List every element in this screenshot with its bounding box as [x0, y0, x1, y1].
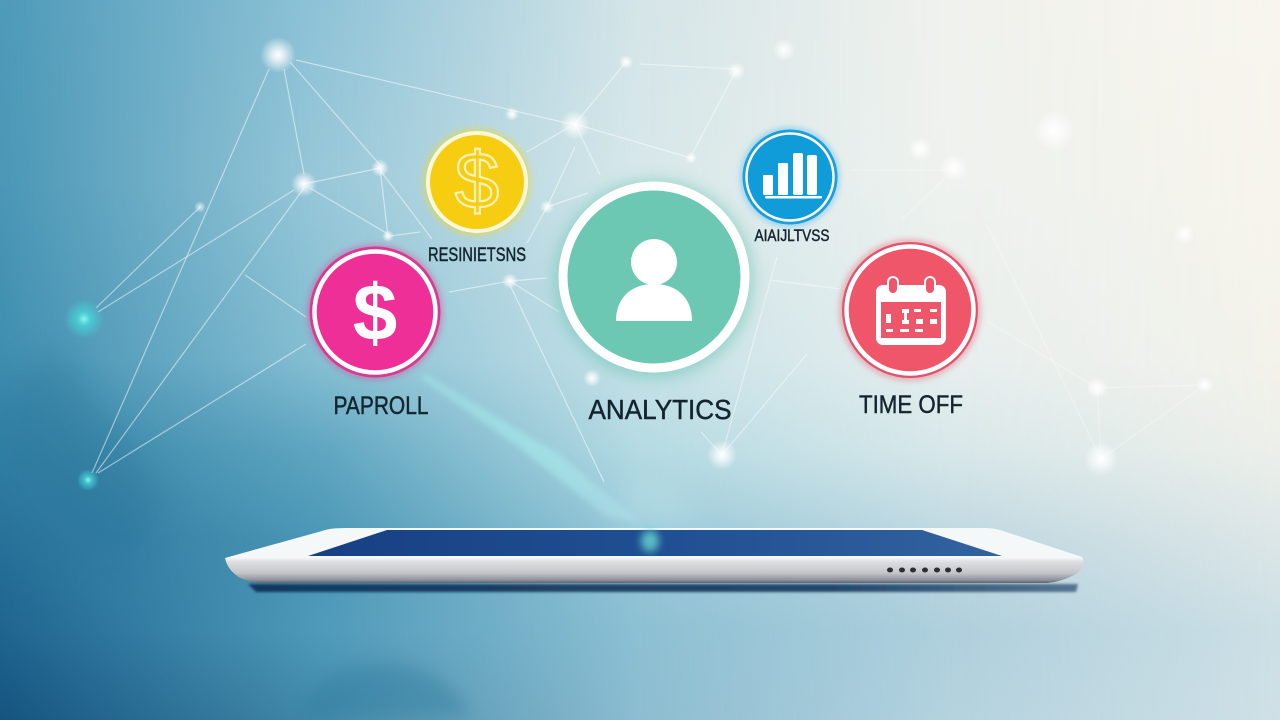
light beam [420, 373, 640, 522]
label: bar chart: AIAIJLTVSS [754, 226, 830, 245]
icon: yellow dollar: $ [455, 136, 499, 225]
label: payroll: PAPROLL [334, 392, 429, 420]
icon: calendar [839, 239, 981, 381]
label: analytics: ANALYTICS [588, 394, 732, 425]
icon: yellow dollar [423, 128, 531, 236]
tablet top face [225, 528, 1083, 560]
label: time off: TIME OFF [859, 391, 963, 419]
tablet edge [225, 558, 1083, 583]
screen glow [641, 530, 659, 552]
tablet shadow [248, 584, 1078, 592]
label: yellow dollar: RESINIETSNS [428, 245, 526, 266]
icon: bar chart [740, 127, 840, 227]
tablet [225, 528, 1083, 592]
icon: payroll dollar [307, 244, 443, 380]
icon: central person [555, 180, 753, 378]
network lines [92, 60, 1205, 482]
tablet screen [308, 530, 1002, 556]
glowing network nodes [64, 37, 1214, 491]
speaker dots [887, 568, 962, 572]
icon: payroll dollar: $ [353, 268, 397, 357]
